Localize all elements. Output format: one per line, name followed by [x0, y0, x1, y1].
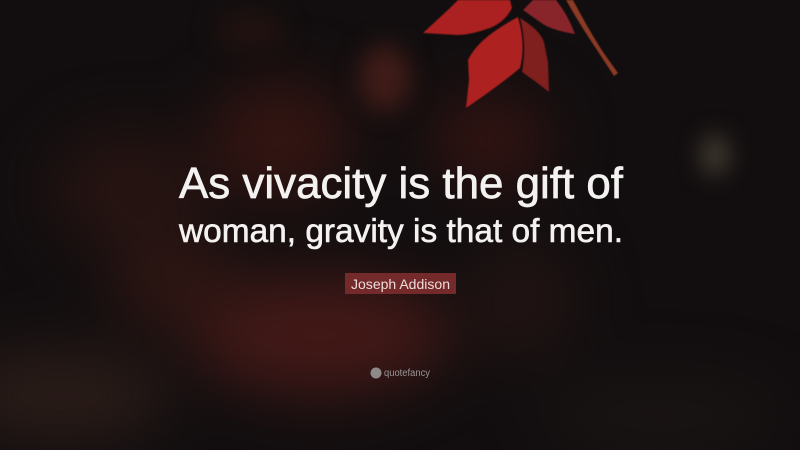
leaf lobe right — [523, 0, 575, 34]
leaf lobe lower left — [466, 17, 523, 108]
quotefancy logo: quotefancy — [384, 368, 430, 379]
author badge: Joseph Addison — [351, 276, 450, 292]
author badge — [345, 273, 456, 294]
quote line 2: woman, gravity is that of men. — [178, 212, 623, 249]
leaf lobe lower right — [520, 18, 549, 92]
quote text — [178, 159, 624, 249]
stem — [566, 0, 618, 76]
icon: logo circle — [370, 368, 382, 378]
icon: red leaf — [423, 0, 618, 108]
leaf lobe left — [423, 0, 512, 35]
quote line 1: As vivacity is the gift of — [179, 159, 624, 208]
